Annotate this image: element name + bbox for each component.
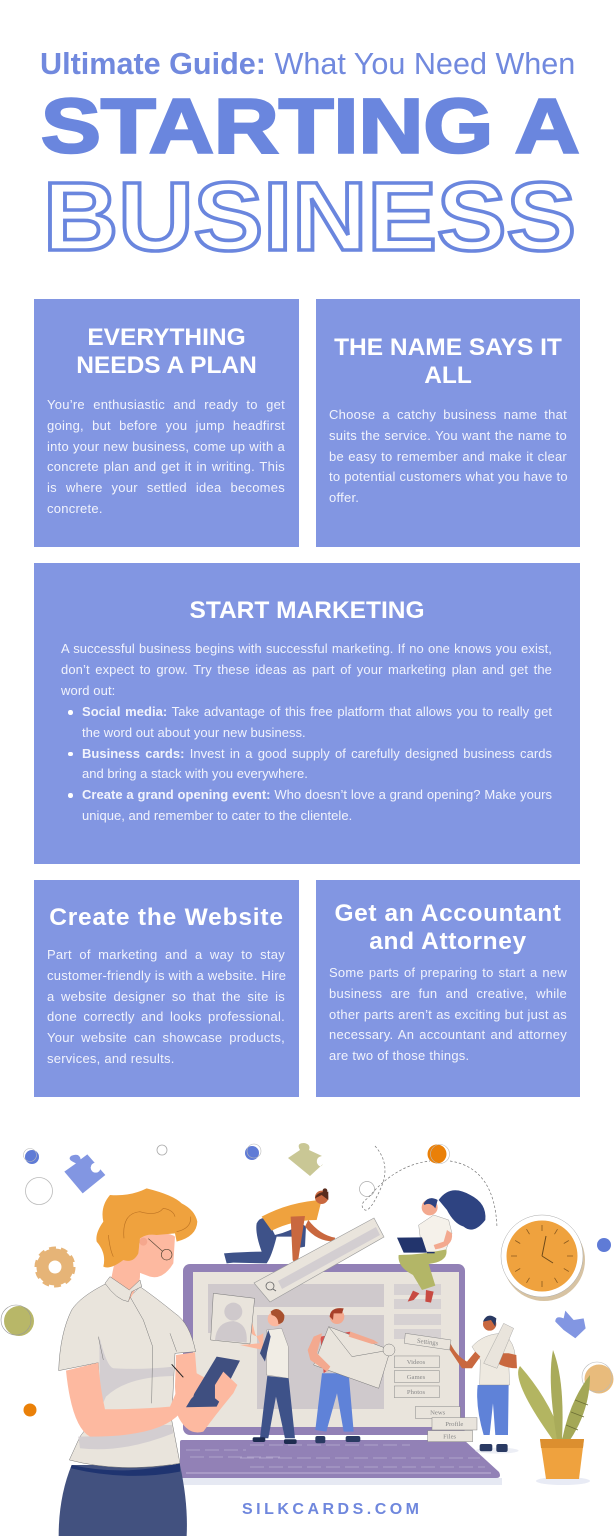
text block: are two of those things. xyxy=(329,1048,469,1063)
text block xyxy=(47,397,285,516)
intro text xyxy=(61,641,552,698)
bullet list: and bring a stack with you everywhere. xyxy=(82,766,308,781)
menu labels: Settings xyxy=(416,1338,439,1347)
icon: plant xyxy=(518,1350,614,1485)
text block: Choose a catchy business name that xyxy=(329,407,567,422)
bullet list: unique, and remember to cater to the clientele. xyxy=(82,808,352,823)
title xyxy=(40,48,580,271)
text block: going, but before you jump headfirst xyxy=(47,418,285,433)
heading xyxy=(76,324,257,379)
heading xyxy=(334,334,562,389)
bullet list: Social media: Take advantage of this free platform that allows you to really get xyxy=(82,704,552,719)
icon: blue puzzle piece xyxy=(64,1154,105,1193)
text block: You’re enthusiastic and ready to get xyxy=(47,397,285,412)
heading: and Attorney xyxy=(369,928,527,955)
text block: Some parts of preparing to start a new xyxy=(329,965,567,980)
large woman with tablet xyxy=(59,1188,240,1536)
text block: to potential customers what you have to xyxy=(329,469,568,484)
footer brand: SILKCARDS.COM xyxy=(242,1501,419,1518)
man with envelope xyxy=(308,1308,395,1443)
bullet list: Business cards: Invest in a good supply of carefully designed business cards xyxy=(82,746,552,760)
heading xyxy=(334,900,562,955)
intro text: A successful business begins with successful marketing. If no one knows you exist, xyxy=(61,641,552,656)
intro text: don’t expect to grow. Try these ideas as part of your marketing plan and get the xyxy=(61,662,552,677)
menu labels: Games xyxy=(407,1374,426,1381)
heading: starting a: STARTING A xyxy=(41,83,580,169)
menu labels: Videos xyxy=(407,1359,426,1366)
heading: Get an Accountant xyxy=(334,900,562,927)
menu labels: Profile xyxy=(445,1421,463,1428)
text block: necessary. An accountant and attorney xyxy=(329,1027,567,1042)
text block: done correctly and looks professional. xyxy=(47,1009,285,1024)
subtitle: Ultimate Guide: What You Need When xyxy=(40,48,575,81)
bullet list: Create a grand opening event: Who doesn’t love a grand opening? Make yours xyxy=(82,787,552,802)
heading: THE NAME SAYS IT xyxy=(334,334,562,361)
floating decorations xyxy=(1,1144,611,1416)
heading: business outline: BUSINESS xyxy=(43,163,576,271)
figures right side xyxy=(308,1190,519,1454)
heading: EVERYTHING xyxy=(87,324,246,351)
icon: gear xyxy=(37,1249,73,1285)
panel: everything needs a plan xyxy=(34,299,299,547)
panel: get an accountant and attorney xyxy=(316,880,580,1097)
text block: Your website can showcase products, xyxy=(47,1030,285,1045)
menu labels xyxy=(394,1333,477,1442)
panel: the name says it all xyxy=(316,299,580,547)
heading: NEEDS A PLAN xyxy=(76,352,257,379)
text block: into your new business, come up with a xyxy=(47,438,285,454)
woman with laptop xyxy=(397,1190,485,1303)
heading: START MARKETING xyxy=(190,597,424,624)
heading: ALL xyxy=(424,362,472,389)
intro text: word out: xyxy=(61,682,115,698)
bullet list xyxy=(68,704,552,823)
text block: suits the service. You want the name to xyxy=(329,428,567,443)
panel: start marketing xyxy=(34,563,580,864)
search bar xyxy=(254,1218,384,1302)
text block xyxy=(329,965,567,1063)
text block: a website designer so that the site is xyxy=(47,988,285,1004)
icon: clock xyxy=(501,1215,585,1301)
man holding profile card xyxy=(211,1293,297,1444)
text block: be easy to remember and make it clear xyxy=(329,448,567,464)
heading: Create the Website xyxy=(49,904,284,931)
icon: small puzzle piece right xyxy=(555,1311,586,1338)
crawling woman xyxy=(224,1188,335,1266)
panel: create the website xyxy=(34,880,299,1097)
menu labels: Files xyxy=(443,1433,457,1440)
text block: customer-friendly is with a website. Hire xyxy=(47,968,286,983)
text block: is where your settled idea becomes xyxy=(47,480,285,495)
text block: offer. xyxy=(329,490,359,505)
menu labels: News xyxy=(430,1410,446,1417)
bullet list: the word out about your new business. xyxy=(82,725,306,740)
text block xyxy=(329,407,568,505)
man with panel xyxy=(449,1316,519,1454)
laptop xyxy=(180,1264,502,1485)
text block xyxy=(47,947,286,1066)
menu labels: Photos xyxy=(407,1389,425,1396)
text block: services, and results. xyxy=(47,1051,175,1066)
text block: Part of marketing and a way to stay xyxy=(47,947,285,962)
text block: concrete. xyxy=(47,501,103,516)
icon: olive puzzle piece xyxy=(288,1143,323,1176)
text block: other parts aren’t as exciting but just as xyxy=(329,1006,567,1022)
text block: business are fun and creative, while xyxy=(329,986,567,1001)
text block: concrete plan and get it in writing. This xyxy=(47,459,285,474)
